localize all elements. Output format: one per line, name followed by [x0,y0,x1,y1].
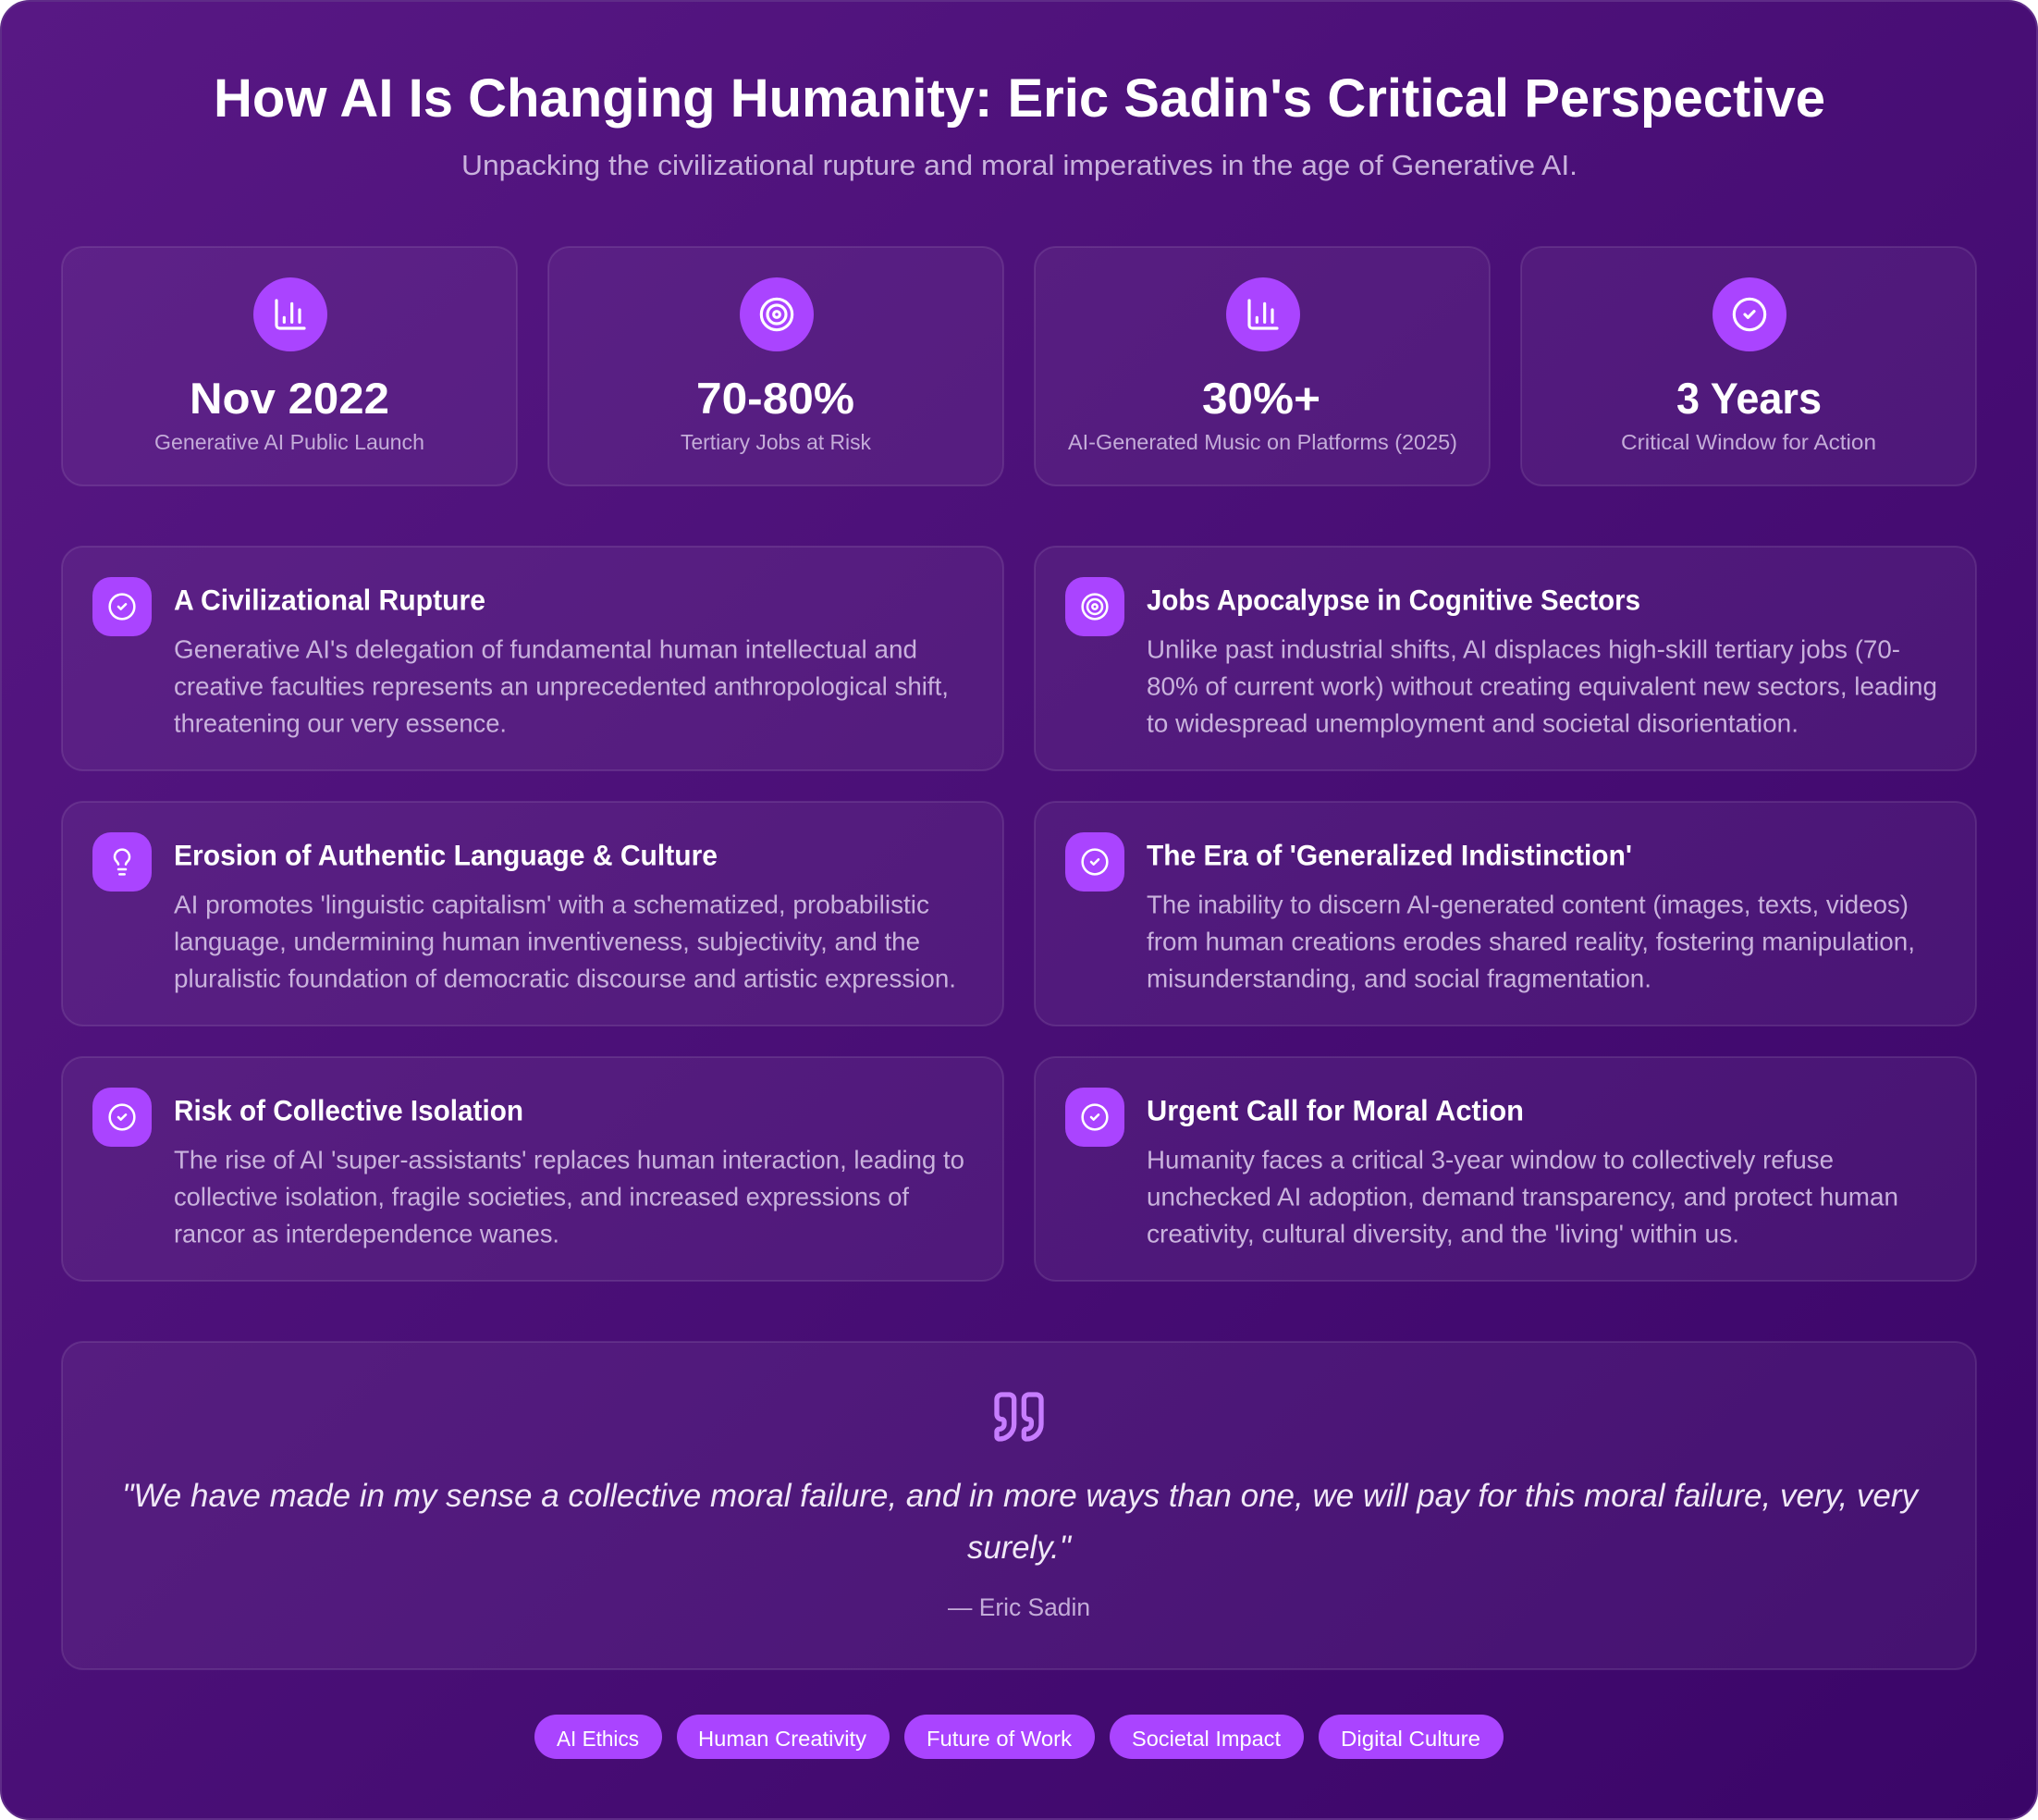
tag: Societal Impact [1110,1715,1304,1759]
tag: Digital Culture: Digital Culture [1341,1727,1480,1751]
panel: quote [62,1342,1976,1669]
card body text: AI promotes 'linguistic capitalism' with a schematized, probabilistic [174,890,929,919]
card body text: threatening our very essence. [174,708,507,738]
card body text: 80% of current work) without creating equivalent new sectors, leading [1147,671,1937,701]
tag: Human Creativity: Human Creativity [698,1727,866,1751]
card heading: A Civilizational Rupture [174,583,485,616]
tag: Societal Impact: Societal Impact [1132,1727,1281,1751]
card body text [174,1145,964,1248]
stat value: Nov 2022 [190,374,389,423]
card body text [174,890,956,993]
stat card: 3 Years [1521,247,1976,486]
card heading: Erosion of Authentic Language & Culture [174,838,718,871]
quote text [122,1478,1920,1566]
stat card: Nov 2022 [62,247,517,486]
card body text: The rise of AI 'super-assistants' replaces human interaction, leading to [174,1145,964,1174]
icon: lightbulb [92,832,152,892]
card body text: creativity, cultural diversity, and the 'living' within us. [1147,1219,1739,1248]
tag: Future of Work [904,1715,1095,1759]
card body text: to widespread unemployment and societal disorientation. [1147,708,1799,738]
icon: circle check [1065,832,1124,892]
card body text: from human creations erodes shared reality, fostering manipulation, [1147,927,1915,956]
card body text: pluralistic foundation of democratic discourse and artistic expression. [174,964,956,993]
card body text: rancor as interdependence wanes. [174,1219,559,1248]
stat card: 30%+ [1035,247,1490,486]
icon: target [740,277,814,351]
card body text: language, undermining human inventiveness, subjectivity, and the [174,927,920,956]
icon: circle check [92,1088,152,1147]
quote text: "We have made in my sense a collective moral failure, and in more ways than one, we will pay for this moral failure, very, very [122,1478,1920,1514]
icon: quotation marks [997,1395,1041,1439]
panel: Risk of Collective Isolation [62,1057,1003,1281]
card heading: Urgent Call for Moral Action [1147,1093,1524,1126]
tag: Human Creativity [677,1715,890,1759]
tags row [534,1715,1504,1759]
stat card: 70-80% [548,247,1003,486]
tag: Digital Culture [1319,1715,1504,1759]
card heading: The Era of 'Generalized Indistinction' [1147,838,1632,871]
card body text: The inability to discern AI-generated content (images, texts, videos) [1147,890,1909,919]
stat label: Generative AI Public Launch [154,430,424,454]
icon: circle check [92,577,152,636]
icon: circle check [1713,277,1786,351]
icon: bar chart [253,277,327,351]
tag: AI Ethics: AI Ethics [557,1727,639,1751]
stat value: 30%+ [1202,374,1320,423]
stat label: AI-Generated Music on Platforms (2025) [1068,430,1457,454]
card body text: creative faculties represents an unprecedented anthropological shift, [174,671,949,701]
panel: The Era of 'Generalized Indistinction' [1035,802,1976,1026]
quote text: surely." [967,1530,1073,1566]
card body text [174,634,949,738]
subtitle: Unpacking the civilizational rupture and moral imperatives in the age of Generative AI. [461,149,1578,181]
stat value: 3 Years [1676,374,1822,423]
card body text [1147,1145,1898,1248]
stat label: Tertiary Jobs at Risk [681,430,871,454]
stat value: 70-80% [696,374,854,423]
card body text [1147,634,1937,738]
panel: Jobs Apocalypse in Cognitive Sectors [1035,547,1976,770]
card heading: Jobs Apocalypse in Cognitive Sectors [1147,583,1640,616]
stat label: Critical Window for Action [1621,430,1876,454]
card body text: Generative AI's delegation of fundamental human intellectual and [174,634,917,664]
tag: AI Ethics [534,1715,662,1759]
card body text: collective isolation, fragile societies, and increased expressions of [174,1182,909,1211]
panel: Urgent Call for Moral Action [1035,1057,1976,1281]
quote attribution: — Eric Sadin [948,1593,1090,1621]
title: How AI Is Changing Humanity: Eric Sadin's Critical Perspective [214,68,1825,129]
card body text: unchecked AI adoption, demand transparency, and protect human [1147,1182,1898,1211]
card body text [1147,890,1915,993]
panel: Erosion of Authentic Language & Culture [62,802,1003,1026]
icon: target [1065,577,1124,636]
card body text: misunderstanding, and social fragmentation. [1147,964,1651,993]
header [214,68,1825,181]
card body text: Humanity faces a critical 3-year window to collectively refuse [1147,1145,1834,1174]
tag: Future of Work: Future of Work [927,1727,1072,1751]
card heading: Risk of Collective Isolation [174,1093,523,1126]
icon: circle check [1065,1088,1124,1147]
card body text: Unlike past industrial shifts, AI displaces high-skill tertiary jobs (70- [1147,634,1900,664]
icon: bar chart [1226,277,1300,351]
panel: A Civilizational Rupture [62,547,1003,770]
